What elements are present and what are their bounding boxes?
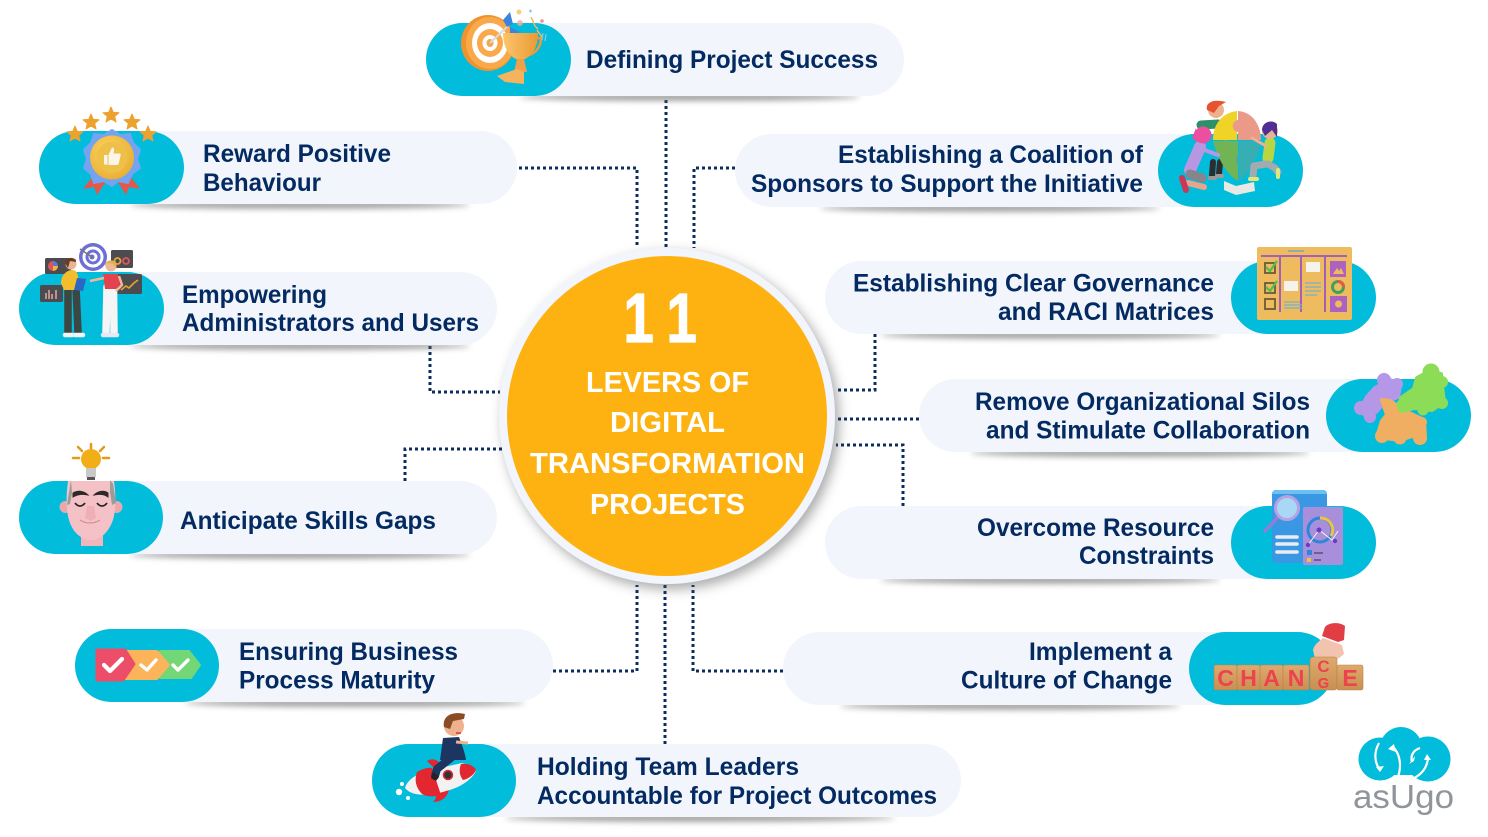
icon: CHANGE blocks with hand: A	[1263, 665, 1280, 691]
icon: CHANGE blocks with hand: C	[1217, 665, 1234, 691]
panel: Reward Positive Behaviour	[39, 107, 517, 209]
centre heading: DIGITAL	[610, 407, 725, 439]
logo cloud	[1358, 727, 1450, 782]
connectors	[405, 100, 919, 744]
panel: Holding Team Leaders Accountable: Accountable for Project Outcomes	[537, 782, 937, 810]
panel: Establishing a Coalition of Sponsors: Sponsors to Support the Initiative	[751, 170, 1143, 198]
panel: Anticipate Skills Gaps	[19, 444, 497, 559]
icon: three check tags	[97, 650, 200, 680]
panel: Empowering Administrators and Users	[19, 243, 497, 350]
icon: CHANGE blocks with hand: G	[1318, 675, 1329, 692]
panel: Implement a Culture of Change: Culture of Change	[961, 666, 1172, 694]
panel: Holding Team Leaders Accountable: Holding Team Leaders	[537, 753, 799, 781]
panel: Remove Organizational Silos: Remove Organizational Silos	[975, 388, 1310, 416]
icon: people assembling puzzle	[1182, 101, 1278, 195]
panel: Establishing a Coalition of Sponsors	[735, 101, 1303, 212]
icon: CHANGE blocks with hand: H	[1240, 665, 1257, 691]
icon: kanban board	[1257, 247, 1352, 320]
panel: Empowering Administrators and Users: Empowering	[182, 281, 327, 309]
panel: Establishing Clear Governance: Establishing Clear Governance	[853, 270, 1214, 298]
panel: Defining Project Success	[426, 10, 904, 101]
panel: Establishing Clear Governance	[825, 247, 1376, 339]
icon: document with magnifier	[1265, 490, 1343, 565]
panel: Establishing a Coalition of Sponsors: Establishing a Coalition of	[838, 141, 1144, 169]
centre heading	[530, 367, 805, 521]
panel: Defining Project Success: Defining Project Success	[586, 46, 878, 74]
panel: Reward Positive Behaviour: Reward Positive	[203, 140, 391, 168]
panel: Empowering Administrators and Users: Administrators and Users	[182, 309, 479, 337]
panel: Remove Organizational Silos: and Stimulate Collaboration	[986, 416, 1310, 444]
icon: CHANGE blocks with hand	[1214, 623, 1363, 692]
centre heading: TRANSFORMATION	[530, 448, 805, 480]
panel: Holding Team Leaders Accountable	[372, 713, 961, 822]
number 11: 11	[624, 280, 712, 358]
icon: head with light bulb	[60, 444, 122, 546]
panel: Reward Positive Behaviour: Behaviour	[203, 169, 321, 197]
panel: Implement a Culture of Change	[783, 623, 1363, 710]
centre heading: LEVERS OF	[586, 367, 749, 399]
panel: Anticipate Skills Gaps: Anticipate Skills Gaps	[180, 507, 436, 535]
panel: Ensuring Business Process Maturity: Process Maturity	[239, 666, 435, 694]
icon: two people with dashboards	[40, 243, 142, 335]
icon: puzzle pieces	[1354, 364, 1448, 445]
logo wordmark: asUgo	[1353, 778, 1454, 815]
centre heading: PROJECTS	[590, 489, 745, 521]
logo: asUgo	[1353, 727, 1454, 815]
icon: CHANGE blocks with hand: C	[1317, 657, 1330, 676]
icon: medal with stars	[67, 107, 156, 195]
panel: Ensuring Business Process Maturity	[75, 629, 553, 707]
panel: Establishing Clear Governance: and RACI Matrices	[998, 298, 1214, 326]
central circle	[499, 248, 839, 589]
panel: Overcome Resource Constraints: Constraints	[1079, 542, 1214, 570]
panel: Remove Organizational Silos	[919, 364, 1471, 457]
panel: Overcome Resource Constraints: Overcome Resource	[977, 514, 1214, 542]
panel: Implement a Culture of Change: Implement a	[1029, 638, 1173, 666]
icon: target and trophy	[461, 10, 546, 84]
icon: CHANGE blocks with hand: N	[1288, 665, 1304, 691]
icon: CHANGE blocks with hand: E	[1342, 665, 1358, 691]
panel: Ensuring Business Process Maturity: Ensuring Business	[239, 638, 458, 666]
panel: Overcome Resource Constraints	[825, 490, 1376, 584]
icon: man on a rocket	[396, 713, 476, 802]
